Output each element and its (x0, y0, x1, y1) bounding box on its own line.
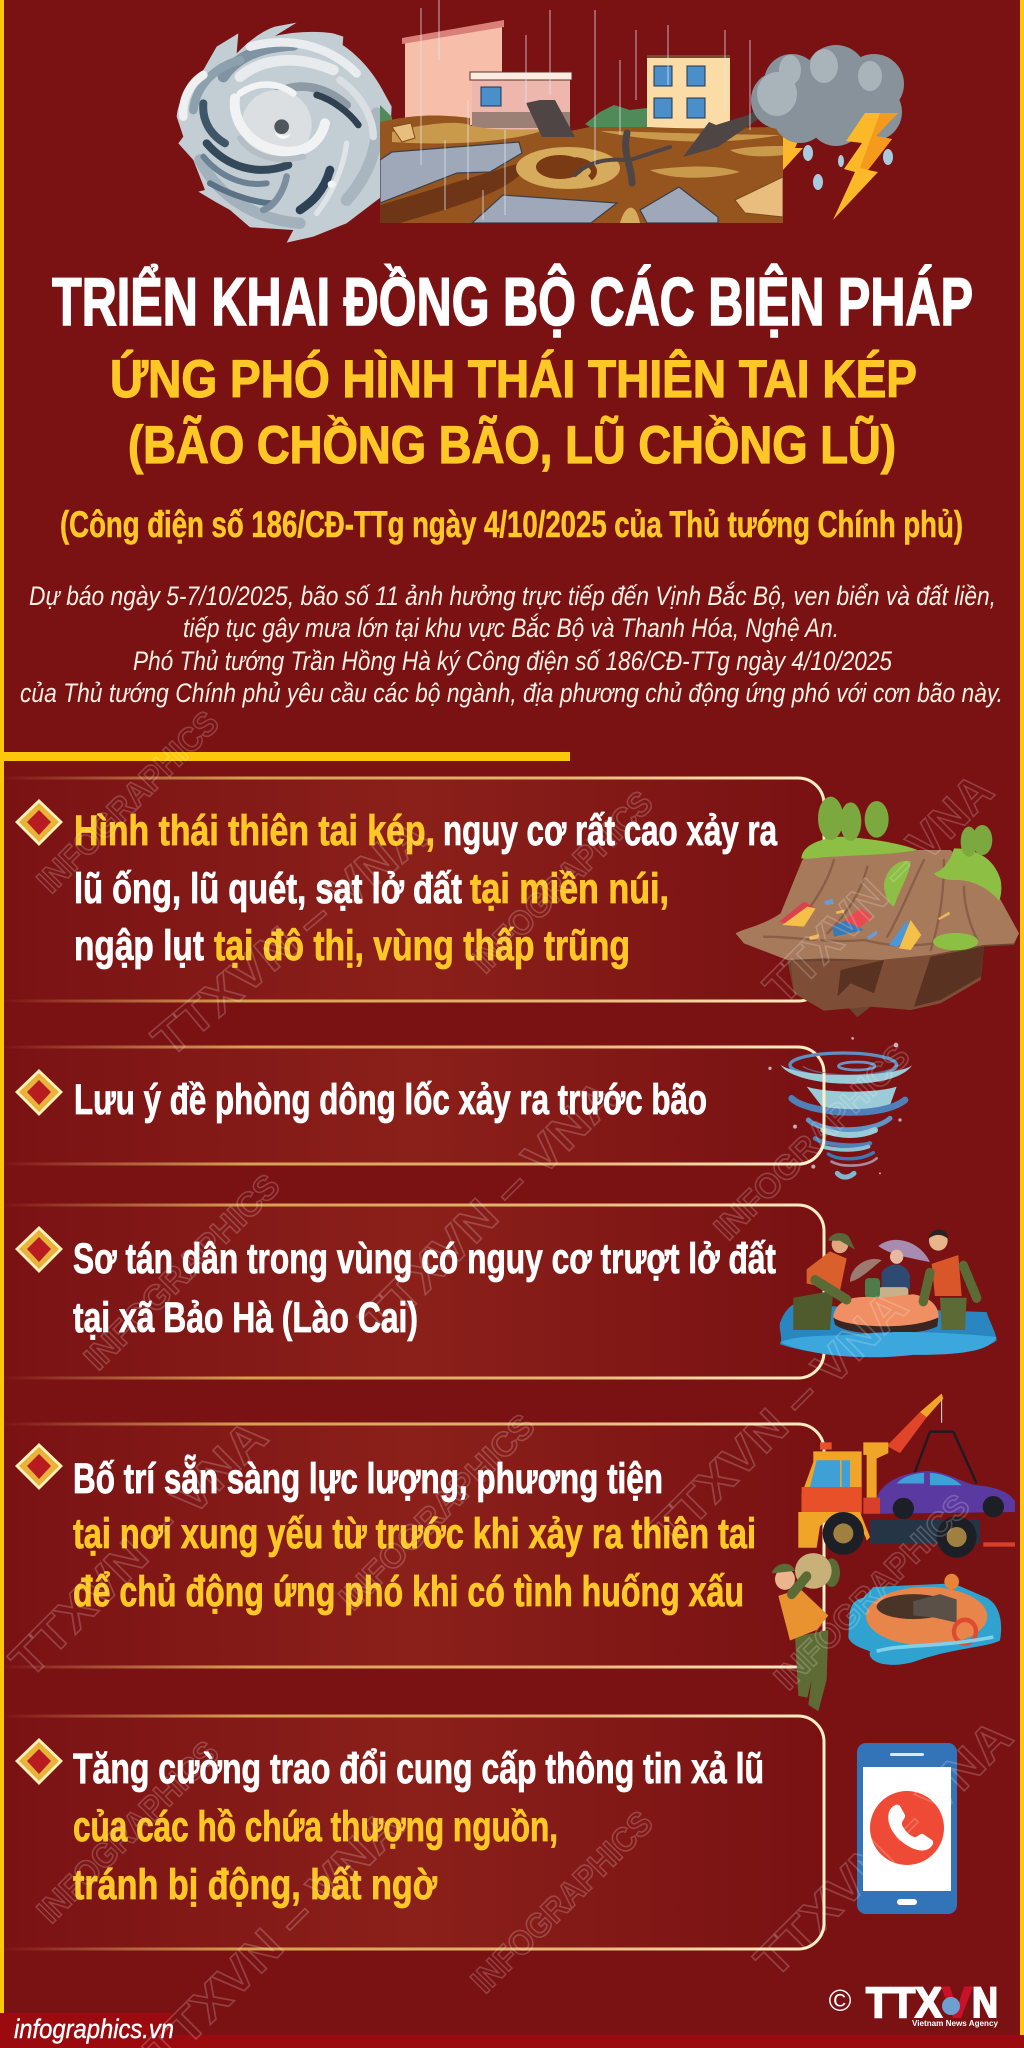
panel 1 text: lũ ống, lũ quét, sạt lở đất (74, 865, 462, 913)
intro paragraph: tiếp tục gây mưa lớn tại khu vực Bắc Bộ và Thanh Hóa, Nghệ An. (183, 612, 839, 643)
watermarks: TTXVN – VNA (143, 809, 437, 1068)
watermarks: INFOGRAPHICS (30, 704, 227, 901)
panel 3: evacuation (4, 1205, 824, 1378)
panel 5 text: tránh bị động, bất ngờ (73, 1861, 437, 1909)
panel 3 text: tại xã Bảo Hà (Lào Cai) (73, 1294, 418, 1342)
panel 4 text: Bố trí sẵn sàng lực lượng, phương tiện (73, 1454, 663, 1503)
illustration: tornado (768, 1037, 912, 1177)
illustration: soldiers rescuing people on a raft (780, 1230, 997, 1357)
panel 1 text: tại đô thị, vùng thấp trũng (214, 922, 630, 970)
rain (421, 0, 750, 220)
watermarks: INFOGRAPHICS (464, 784, 661, 981)
wooden planks (392, 123, 783, 217)
panel 2 text: Lưu ý đề phòng dông lốc xảy ra trước bão (74, 1076, 707, 1124)
illustration: satellite cyclone (177, 23, 392, 243)
watermarks: TTXVN – VNA (745, 1710, 1023, 1988)
panel 1 text: ngập lụt (74, 922, 204, 970)
illustration: rescue raft on water (848, 1574, 1001, 1665)
icon: smartphone with call symbol (857, 1743, 957, 1914)
illustration: storm cloud with lightning (751, 45, 904, 220)
panel 4 text: để chủ động ứng phó khi có tình huống xấu (73, 1568, 744, 1616)
TTXVN logo: Vietnam News Agency (912, 2019, 999, 2028)
small house (470, 72, 572, 130)
diamond bullet (15, 799, 63, 846)
TTXVN logo: © (829, 1983, 852, 2018)
bottom band (0, 2013, 1024, 2048)
subtitle line 2: (BÃO CHỒNG BÃO, LŨ CHỒNG LŨ) (128, 415, 896, 475)
big lightning bolt (833, 113, 898, 220)
panel 1 text (74, 807, 778, 970)
illustration: soldier carrying a sack (772, 1553, 840, 1711)
panel 4 text: tại nơi xung yếu từ trước khi xảy ra thiên tai (73, 1510, 756, 1558)
watermarks: INFOGRAPHICS (464, 1804, 661, 2001)
intro paragraph (20, 580, 1003, 708)
diamond bullet (15, 1069, 63, 1116)
TTXVN logo (829, 1979, 999, 2028)
watermarks: INFOGRAPHICS (767, 1487, 978, 1698)
evacuees (850, 1240, 930, 1302)
diamond bullet (15, 1738, 63, 1785)
yellow divider bar (0, 752, 570, 761)
pink building (402, 20, 504, 125)
panel 1 text: Hình thái thiên tai kép, (74, 807, 435, 855)
illustration: flooded town with debris (380, 0, 783, 223)
watermarks: INFOGRAPHICS (332, 1407, 543, 1618)
foreground splash (780, 1332, 997, 1357)
watermarks: INFOGRAPHICS (707, 1037, 918, 1248)
diamond bullet (15, 1226, 63, 1273)
watermarks: INFOGRAPHICS (30, 1734, 227, 1931)
muddy ground (380, 115, 783, 223)
sliding houses (779, 898, 950, 950)
panel 1 text: tại miền núi, (470, 865, 669, 913)
panel 4: readiness of forces (4, 1424, 824, 1667)
watermarks: TTXVN – VNA (640, 1280, 918, 1558)
car (877, 1471, 1015, 1519)
source url: infographics.vn (14, 2014, 174, 2044)
watermarks: TTXVN – VNA (350, 1070, 628, 1348)
panel 3 text: Sơ tán dân trong vùng có nguy cơ trượt lở đất (73, 1235, 776, 1283)
greenery on hill (801, 837, 1001, 950)
watermarks: INFOGRAPHICS (77, 1167, 288, 1378)
truck wheels (823, 1512, 977, 1558)
panel 1: compound disaster risk (4, 778, 824, 1001)
water (780, 1304, 997, 1356)
panel 5 text: của các hồ chứa thượng nguồn, (73, 1803, 558, 1851)
TTXVN logo: N (972, 1979, 998, 2027)
grey slabs (380, 142, 718, 223)
broken trees (526, 100, 760, 157)
watermarks: TTXVN – VNA (0, 1410, 278, 1688)
TTXVN logo: TTX (866, 1979, 942, 2027)
intro paragraph: Phó Thủ tướng Trần Hồng Hà ký Công điện số 186/CĐ-TTg ngày 4/10/2025 (133, 646, 893, 676)
TTXVN logo: V (942, 1979, 972, 2027)
panel 3 text (73, 1235, 776, 1342)
cream building (647, 55, 730, 129)
panel 5 text (73, 1745, 764, 1909)
raindrops (803, 145, 893, 190)
panel 1 text: nguy cơ rất cao xảy ra (443, 807, 778, 855)
truck cab (798, 1442, 1015, 1548)
subtitle line 1: ỨNG PHÓ HÌNH THÁI THIÊN TAI KÉP (110, 348, 917, 409)
panel 2: whirlwind warning (4, 1047, 824, 1164)
soldier right (923, 1230, 977, 1330)
raft (833, 1294, 939, 1334)
watermarks: TTXVN – VNA (754, 764, 1004, 1014)
diamond bullet (15, 1443, 63, 1490)
illustration: tow truck lifting a car (798, 1393, 1015, 1558)
panel 5 text: Tăng cường trao đổi cung cấp thông tin xả lũ (73, 1745, 764, 1793)
watermarks (0, 704, 1023, 2048)
panel 5: reservoir information (4, 1716, 824, 1949)
trees (818, 797, 992, 857)
illustration: landslide hill (736, 797, 1019, 1017)
soldier left (793, 1233, 855, 1330)
panel 4 text (73, 1454, 756, 1616)
